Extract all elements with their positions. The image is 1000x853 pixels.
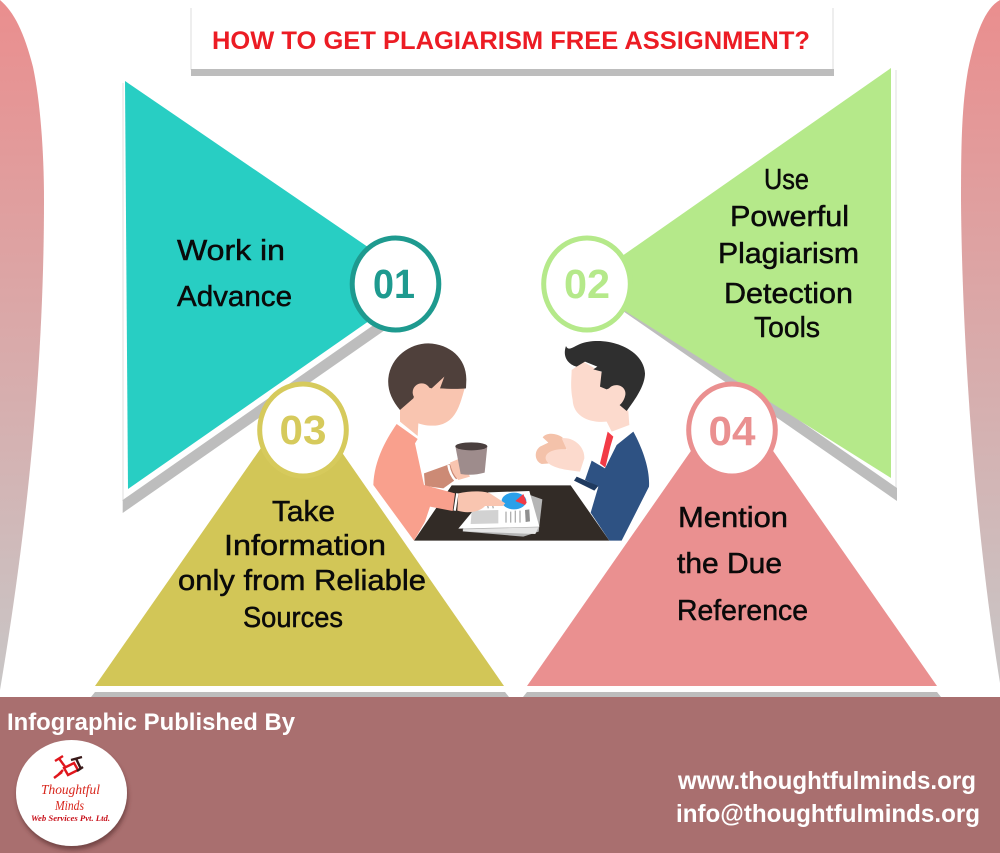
- tie: [600, 432, 613, 468]
- green triangle: [582, 68, 891, 478]
- table: [414, 485, 609, 541]
- website: www.thoughtfulminds.org: [677, 767, 976, 795]
- logo text: Thoughtful: [41, 783, 100, 798]
- text: use powerful plagiarism detection tools: Use: [764, 164, 809, 196]
- text: mention the due reference: the Due: [677, 548, 782, 580]
- ear: [413, 383, 431, 401]
- number badge 02: [544, 238, 630, 330]
- text: mention the due reference: Reference: [677, 595, 808, 627]
- number badge 03: 03: [280, 407, 326, 453]
- panel: 01 work in advance: [122, 81, 439, 513]
- illustration: two people at a table: [373, 341, 649, 541]
- cup: [455, 446, 487, 475]
- hair: [565, 341, 645, 411]
- cuff: [574, 477, 598, 491]
- left curtain decoration: [0, 0, 44, 690]
- text: mention the due reference: Mention: [678, 502, 788, 534]
- back arm: [424, 464, 457, 488]
- pink triangle: [527, 392, 937, 686]
- face and neck: [571, 362, 629, 432]
- neck and face: [400, 377, 465, 436]
- hands: [536, 434, 567, 464]
- email: info@thoughtfulminds.org: [676, 800, 980, 828]
- title banner: [190, 8, 834, 76]
- footer band: [0, 697, 1000, 853]
- panel: 04 mention the due reference: [523, 384, 941, 697]
- logo icon: [54, 756, 83, 778]
- shirt: [373, 424, 455, 541]
- publisher heading: Infographic Published By: [7, 709, 296, 736]
- text: use powerful plagiarism detection tools: Detection: [724, 278, 853, 310]
- logo text: Web Services Pvt. Ltd.: [31, 813, 110, 823]
- left person: [373, 343, 505, 541]
- suit: [585, 432, 649, 541]
- text: take information only from reliable sources: Take: [272, 496, 335, 528]
- number badge 02: 02: [564, 261, 610, 307]
- logo text: [31, 783, 110, 823]
- right person: [536, 341, 649, 541]
- teal triangle: [125, 81, 422, 489]
- number badge 01: 01: [373, 261, 415, 307]
- number badge 03: [260, 384, 346, 476]
- pie chart: [502, 493, 526, 509]
- text: mention the due reference: [677, 502, 808, 627]
- logo badge: [16, 740, 127, 846]
- right curtain decoration: [961, 0, 1000, 683]
- yellow triangle: [95, 392, 504, 686]
- number badge 04: 04: [708, 408, 756, 454]
- ear: [608, 385, 625, 406]
- text: work in advance: Work in: [177, 235, 285, 267]
- text: use powerful plagiarism detection tools: [718, 164, 859, 344]
- panel: 03 reliable sources: [91, 384, 509, 697]
- text: take information only from reliable sources: [178, 496, 426, 634]
- forearm hand: [457, 491, 505, 512]
- hand holding cup: [450, 458, 470, 480]
- text: use powerful plagiarism detection tools: Powerful: [730, 201, 849, 233]
- title: HOW TO GET PLAGIARISM FREE ASSIGNMENT?: [212, 27, 810, 55]
- text: work in advance: Advance: [177, 281, 292, 313]
- number badge 04: [689, 384, 775, 476]
- text: take information only from reliable sources: only from Reliable: [178, 565, 426, 597]
- logo text: Minds: [54, 799, 84, 814]
- number badge 01: [352, 238, 439, 330]
- text: take information only from reliable sources: Information: [224, 530, 386, 562]
- document with chart: [458, 491, 542, 537]
- hair: [388, 343, 466, 410]
- panel: 02 plagiarism detection tools: [544, 68, 897, 501]
- text: use powerful plagiarism detection tools: Tools: [754, 312, 820, 344]
- text: work in advance: [177, 235, 292, 313]
- text: take information only from reliable sources: Sources: [243, 602, 343, 634]
- text: use powerful plagiarism detection tools: Plagiarism: [718, 238, 859, 270]
